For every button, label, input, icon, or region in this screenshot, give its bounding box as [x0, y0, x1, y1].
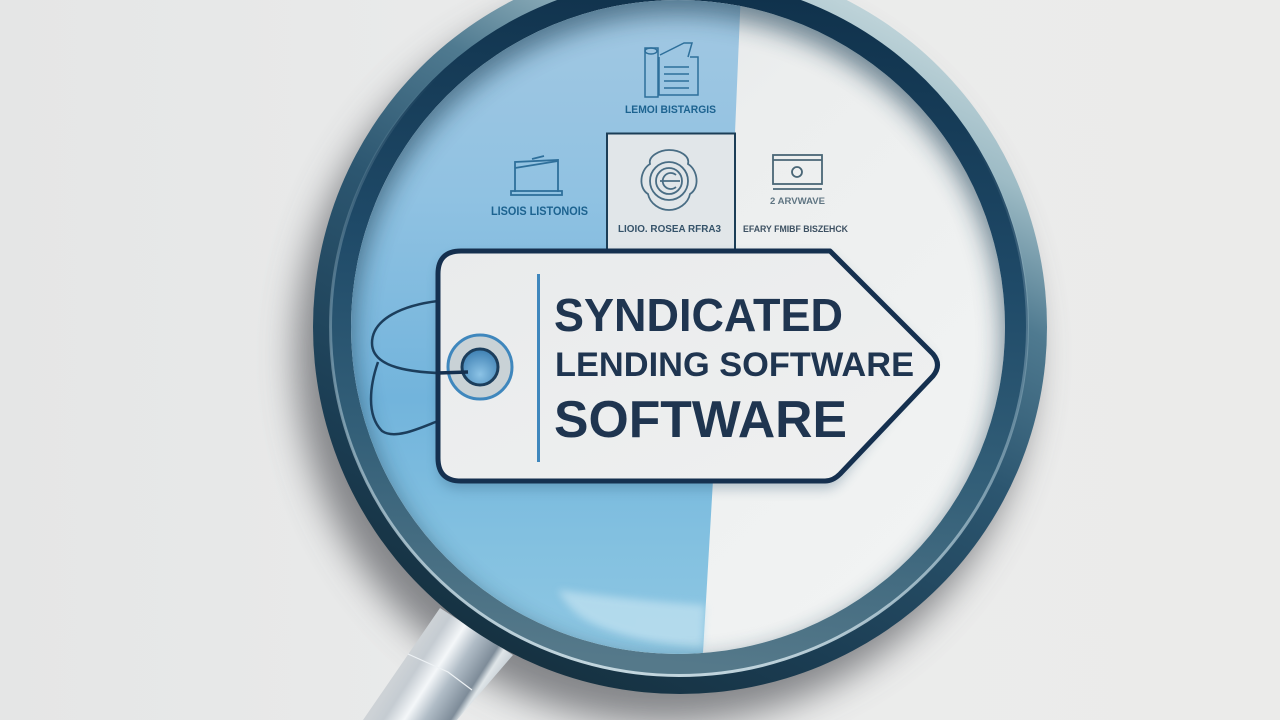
tag heading: SOFTWARE [554, 391, 847, 449]
lens blue half [340, 0, 741, 670]
tag heading [554, 289, 914, 449]
icon: laptop [511, 156, 562, 195]
lens white half [340, 0, 1020, 670]
icon: document stack [645, 43, 698, 97]
tag shadow [438, 256, 933, 489]
lens glare [558, 590, 705, 648]
label: left icon: LISOIS LISTONOIS [491, 206, 588, 218]
tag shape [438, 251, 938, 481]
tag heading: LENDING SOFTWARE [555, 346, 914, 384]
lens [351, 0, 1005, 654]
tag vertical divider [537, 274, 540, 462]
magnifier rim [313, 0, 1047, 694]
label: right icon lower: EFARY FMIBF BISZEHCK [743, 224, 848, 235]
price tag [438, 251, 938, 481]
label: top icon: LEMOI BISTARGIS [625, 104, 716, 116]
label: right icon upper: 2 ARVWAVE [770, 196, 825, 207]
icon: browser window [773, 155, 822, 189]
label: center icon: LIOIO. ROSEA RFRA3 [618, 223, 721, 235]
lens inner shadow [351, 0, 1005, 654]
tag string [371, 301, 470, 434]
icon: central emblem [641, 150, 697, 210]
center feature box [607, 134, 735, 254]
magnifier handle [363, 608, 513, 720]
magnifying glass infographic [269, 0, 1056, 720]
tag heading: SYNDICATED [554, 289, 843, 341]
tag eyelet [438, 335, 512, 399]
drop shadow of glass [296, 0, 1032, 720]
